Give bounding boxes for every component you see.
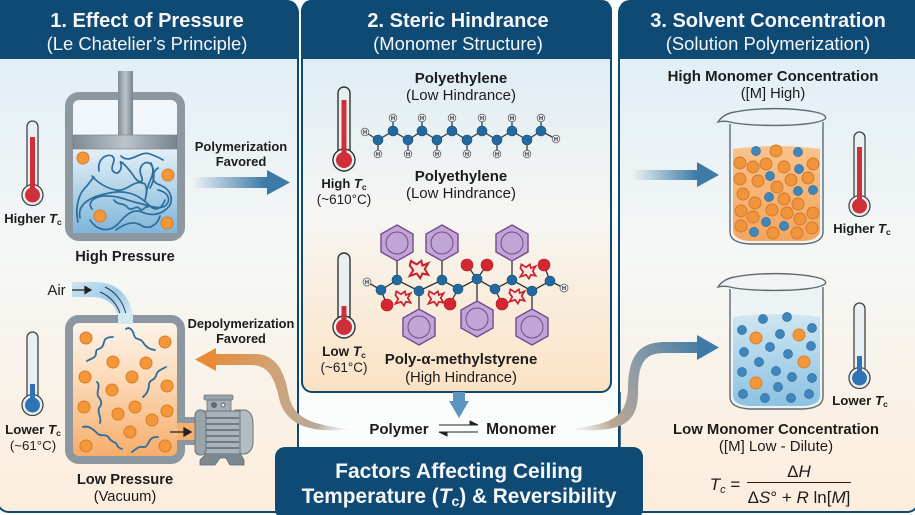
label: right lower Tc: Lower T [832,393,883,408]
label: polymerization favored [195,139,287,169]
label: polyethylene repeated [406,168,516,202]
phenyl rings [381,225,548,345]
orange particles [750,329,810,389]
hydrogen letters: H [554,137,558,143]
icon: thermometer right lower [849,303,870,388]
top box [207,400,231,412]
icon: thermometer lower Tc [22,332,43,416]
hydrogen letters: H [562,286,566,292]
heading: panel 2: (Monomer Structure) [373,33,543,54]
title box [275,447,643,515]
heading: panel 3: (Solution Polymerization) [666,33,870,54]
label: low Tc: c [361,350,366,360]
label: depolymerization favored: Favored [216,331,266,346]
label: right higher Tc: Higher T [833,221,886,236]
red methyl atoms [381,259,550,311]
label: lower Tc [5,422,61,453]
equilibrium arrows [439,421,478,436]
phenyl inner rings [386,232,543,338]
equilibrium: polymer monomer: Monomer [486,421,556,438]
label: poly-alpha-methylstyrene [385,351,537,386]
motor feet [200,450,244,465]
bonds [365,118,556,154]
label: low pressure: Low Pressure [77,472,173,488]
hydrogen letters: H [465,152,469,158]
rear cap [235,410,253,454]
icon: vacuum chamber [69,313,181,460]
label: lower Tc: (~61°C) [10,438,56,453]
front cap [195,410,206,455]
arrow: down to equilibrium [449,392,469,418]
blue particles [750,146,818,236]
label: right lower Tc: c [883,399,888,409]
title box: c [451,493,459,509]
hydrogen letters: H [495,152,499,158]
label: poly-alpha-methylstyrene: Poly-α-methylstyrene [385,351,537,368]
equation: ceiling temperature: ΔS° + R ln[M] [748,488,850,507]
panel 1 header [0,0,298,59]
hydrogen letters: H [510,116,514,122]
label: low Tc [320,344,368,375]
label: polyethylene: Polyethylene [415,70,507,87]
arrow: to high concentration beaker [632,162,719,187]
label: low monomer concentration [673,422,879,455]
label: low pressure [77,472,173,505]
equation: ceiling temperature: T [710,475,722,494]
carbon atoms [373,126,546,145]
panel 2 header [302,0,611,59]
panel 3 header [619,0,915,59]
bonds [367,255,564,315]
carbon atoms [376,274,555,296]
arrow: to monomer-dilute beaker [567,335,719,430]
piston plate [73,135,177,149]
orange particles [734,145,819,239]
heading: panel 1: 1. Effect of Pressure [50,10,244,32]
icon: thermometer high Tc [333,87,355,171]
label: polyethylene repeated: (Low Hindrance) [406,185,516,202]
heading: panel 1: (Le Chatelier’s Principle) [47,33,247,54]
icon: vacuum pump motor [170,395,253,465]
hydrogen letters [363,116,558,158]
icon: air inlet pipe [72,282,133,322]
hydrogen atoms [361,114,560,158]
heading: panel 1 [47,10,247,54]
hydrogen letters: H [525,152,529,158]
beaker rim with spout [718,109,826,125]
title box: ) & Reversibility [459,485,617,508]
label: high Tc: c [362,182,367,192]
icon: beaker low concentration [718,274,826,409]
equation: ceiling temperature: c [720,484,726,496]
orange solution [733,146,820,241]
hydrogen atoms [363,278,568,292]
label: low monomer concentration: ([M] Low - Dilute) [719,438,833,455]
label: higher Tc: Higher T [4,211,57,226]
pipe opening [118,313,133,324]
pump arrow [170,428,191,436]
label: high monomer concentration: High Monomer Concentration [668,68,878,85]
label: depolymerization favored: Depolymerization [188,316,295,331]
equation: ceiling temperature [710,462,851,507]
liquid [73,149,177,233]
hydrogen letters [365,280,566,292]
label: high monomer concentration [668,68,878,102]
arrow: depolymerization [195,348,352,430]
label: low Tc: Low T [322,344,361,359]
connecting pipe [177,417,195,445]
piston rod [118,71,133,135]
label: low pressure: (Vacuum) [94,489,156,505]
panel: solvent concentration [619,0,915,512]
hydrogen letters: H [435,152,439,158]
label: depolymerization favored [188,316,295,346]
beaker rim with spout [718,274,826,290]
arrow: polymerization [192,170,290,195]
hydrogen letters: H [420,116,424,122]
polymer chains [77,153,171,230]
label: polyethylene repeated: Polyethylene [415,168,507,185]
icon: beaker high concentration [718,109,826,244]
label: higher Tc: c [57,217,62,227]
steric clash marks [395,261,536,306]
hydrogen letters: H [406,152,410,158]
panel: steric hindrance [302,0,611,392]
title box: Temperature (T [302,485,451,508]
heading: panel 2 [367,10,549,54]
label: polymerization favored: Polymerization [195,139,287,154]
short polymer fragments [83,328,166,452]
hydrogen letters: H [480,116,484,122]
label: low Tc: (~61°C) [320,360,368,375]
label: low monomer concentration: Low Monomer Concentration [673,422,879,438]
label: right higher Tc: c [886,227,891,237]
label: air: Air [47,282,66,299]
label: high pressure: High Pressure [75,249,175,265]
label: lower Tc: c [56,428,61,438]
heading: panel 2: 2. Steric Hindrance [367,10,549,32]
equation: ceiling temperature: = [726,475,740,494]
panel: effect of pressure [0,0,298,512]
label: polyethylene: (Low Hindrance) [406,87,516,104]
hydrogen letters: H [365,280,369,286]
blue solution [733,314,820,406]
label: polymerization favored: Favored [216,154,266,169]
label: air [47,282,91,299]
icon: high pressure piston [69,71,181,237]
diagram: poly-alpha-methylstyrene [363,225,568,345]
centre divider frame [298,392,620,448]
icon: thermometer low Tc [333,253,355,338]
label: high monomer concentration: ([M] High) [741,86,805,102]
label: polyethylene [406,70,516,104]
hydrogen letters: H [539,116,543,122]
icon: thermometer right higher [849,132,870,216]
hydrogen letters: H [363,130,367,136]
label: high Tc [317,176,371,207]
arrow: air [72,286,91,294]
ribbed body [203,411,240,454]
title text: Factors Affecting Ceiling [335,460,583,483]
label: poly-alpha-methylstyrene: (High Hindrance) [405,370,517,386]
label: high Tc: (~610°C) [317,192,371,207]
diagram: polyethylene chain [361,114,560,158]
equilibrium: polymer monomer [369,421,556,438]
icon: thermometer higher Tc [22,121,43,206]
orange particles [77,152,174,229]
orange monomers [78,332,173,452]
label: lower Tc: Lower T [5,422,56,437]
heading: panel 3 [650,10,886,54]
blue particles [738,312,816,402]
hydrogen letters: H [450,116,454,122]
label: high Tc: High T [321,176,362,191]
hydrogen letters: H [391,116,395,122]
heading: panel 3: 3. Solvent Concentration [650,10,886,32]
fraction bar [747,482,851,484]
equilibrium: polymer monomer: Polymer [369,421,429,438]
equation: ceiling temperature: ΔH [787,462,812,481]
hydrogen letters: H [376,152,380,158]
